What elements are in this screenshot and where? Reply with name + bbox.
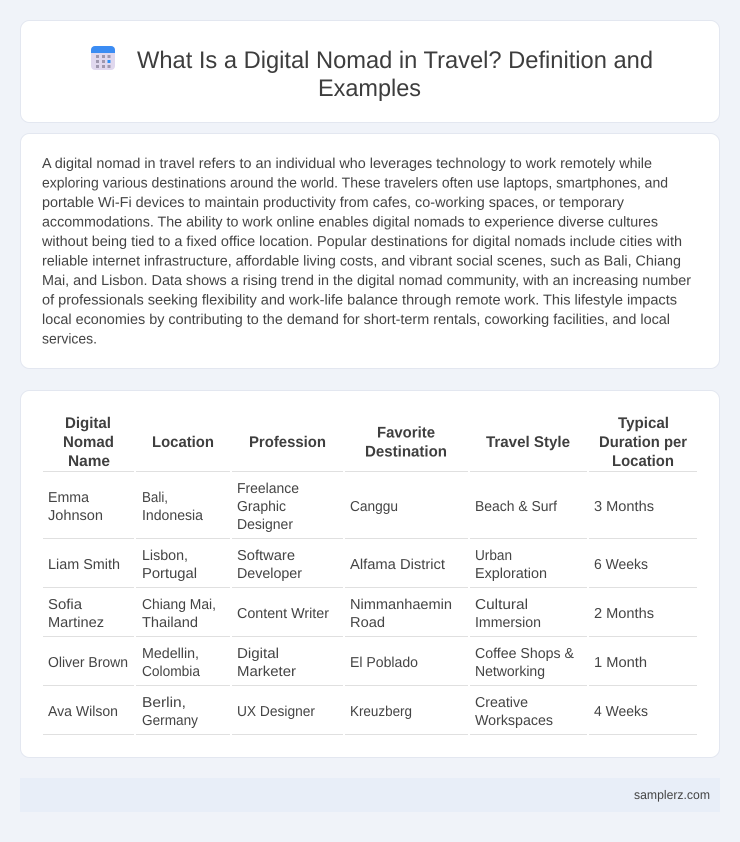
- table header row: Profession: [249, 434, 326, 451]
- row: Liam Smith: Developer: [237, 566, 302, 582]
- row: Sofia Martinez: 2 Months: [594, 606, 654, 622]
- text block: definition paragraph: without being tied to a fixed office location. Popular destinations for digital nomads include cities with: [41, 234, 682, 250]
- title: What Is a Digital Nomad in Travel? Definition and: [137, 47, 653, 74]
- text block: definition paragraph: services.: [42, 332, 97, 348]
- table header row: Typical: [618, 415, 669, 432]
- table header row: Digital: [65, 415, 111, 432]
- title: Examples: [318, 75, 421, 102]
- row: Liam Smith: Lisbon,: [142, 548, 188, 564]
- row: Emma Johnson: Designer: [237, 517, 293, 533]
- table header row: Duration per: [599, 434, 687, 451]
- row: Sofia Martinez: Chiang Mai,: [142, 597, 216, 613]
- row: Liam Smith: 6 Weeks: [594, 557, 648, 573]
- row: Oliver Brown: Medellin,: [142, 646, 199, 662]
- text block: definition paragraph: of professionals seeking flexibility and work-life balance through remote work. This lifestyle impacts: [42, 292, 677, 308]
- text block: definition paragraph: local economies by contributing to the demand for short-term rentals, coworking facilities, and local: [42, 312, 670, 328]
- table header row: Destination: [365, 444, 447, 460]
- table header row: Travel Style: [486, 434, 570, 451]
- icon: calendar: [91, 46, 115, 70]
- title: [137, 47, 653, 102]
- text block: definition paragraph: A digital nomad in travel refers to an individual who leverages technology to work remotely while: [42, 156, 652, 172]
- row: Ava Wilson: UX Designer: [237, 704, 315, 720]
- row: Oliver Brown: Networking: [475, 664, 545, 680]
- row: Sofia Martinez: Road: [350, 615, 385, 631]
- row: Oliver Brown: Marketer: [237, 664, 296, 680]
- row: Emma Johnson: Emma: [48, 490, 89, 506]
- row: Ava Wilson: [48, 695, 648, 729]
- row: Ava Wilson: Ava Wilson: [48, 704, 118, 720]
- row: Emma Johnson: Bali,: [142, 490, 168, 506]
- text block: definition paragraph: accommodations. The ability to work online enables digital nomads to experience diverse cultures: [42, 214, 658, 230]
- row: Ava Wilson: Kreuzberg: [350, 704, 412, 720]
- row: Sofia Martinez: Nimmanhaemin: [350, 597, 452, 613]
- text block: definition paragraph: reliable internet infrastructure, affordable living costs, and vibrant social scenes, such as Bali, Chiang: [42, 254, 681, 270]
- row: Emma Johnson: [48, 481, 654, 533]
- text block: definition paragraph: Mai, and Lisbon. Data shows a rising trend in the digital nomad community, with an increasing number: [42, 273, 691, 289]
- row: Liam Smith: Liam Smith: [48, 557, 120, 573]
- row: Oliver Brown: Colombia: [142, 664, 200, 680]
- footer bar: [20, 778, 720, 812]
- panel: title card: [20, 20, 720, 122]
- panel: description: [20, 134, 720, 368]
- row: Emma Johnson: Graphic: [237, 499, 286, 515]
- table header row: [63, 415, 687, 470]
- row: Liam Smith: Urban: [475, 548, 512, 564]
- text block: definition paragraph: portable Wi-Fi devices to maintain productivity from cafes, co-working spaces, or temporary: [42, 195, 625, 211]
- row: Emma Johnson: Freelance: [237, 481, 299, 497]
- row: Oliver Brown: El Poblado: [350, 655, 418, 671]
- row: Ava Wilson: Berlin,: [142, 695, 186, 711]
- row: Oliver Brown: Digital: [237, 646, 279, 662]
- text block: definition paragraph: [41, 156, 691, 348]
- row: Sofia Martinez: Cultural: [475, 597, 528, 613]
- row: Liam Smith: Alfama District: [350, 557, 445, 573]
- row: Liam Smith: Software: [237, 548, 295, 564]
- row: Ava Wilson: 4 Weeks: [594, 704, 648, 720]
- footer source text: samplerz.com: [634, 788, 710, 802]
- row: Sofia Martinez: Content Writer: [237, 606, 329, 622]
- row: Sofia Martinez: Immersion: [475, 615, 541, 631]
- table header row: Name: [68, 453, 110, 470]
- row: Oliver Brown: Oliver Brown: [48, 655, 128, 671]
- row: Oliver Brown: [48, 646, 647, 680]
- row: Emma Johnson: Canggu: [350, 499, 398, 515]
- row: Ava Wilson: Creative: [475, 695, 528, 711]
- row: Sofia Martinez: Martinez: [48, 615, 104, 631]
- panel: nomad table: [20, 390, 720, 758]
- row: Emma Johnson: Indonesia: [142, 508, 203, 524]
- row: Emma Johnson: 3 Months: [594, 499, 654, 515]
- row: Liam Smith: Portugal: [142, 566, 197, 582]
- row: Sofia Martinez: [48, 597, 654, 631]
- row: Liam Smith: [48, 548, 648, 582]
- row: Oliver Brown: 1 Month: [594, 655, 647, 671]
- row: Ava Wilson: Workspaces: [475, 713, 553, 729]
- row: Liam Smith: Exploration: [475, 566, 547, 582]
- row: Sofia Martinez: Thailand: [142, 615, 198, 631]
- row: Oliver Brown: Coffee Shops &: [475, 646, 574, 662]
- table row lines: [43, 472, 697, 734]
- text block: definition paragraph: exploring various destinations around the world. These travelers often use laptops, smartphones, and: [42, 176, 668, 192]
- row: Emma Johnson: Beach & Surf: [475, 499, 558, 515]
- table header row: Nomad: [63, 434, 114, 451]
- table header row: Favorite: [377, 424, 435, 442]
- row: Ava Wilson: Germany: [142, 713, 199, 729]
- row: Emma Johnson: Johnson: [48, 508, 103, 524]
- row: Sofia Martinez: Sofia: [48, 597, 82, 613]
- table header row: Location: [152, 434, 214, 451]
- table header row: Location: [612, 453, 674, 470]
